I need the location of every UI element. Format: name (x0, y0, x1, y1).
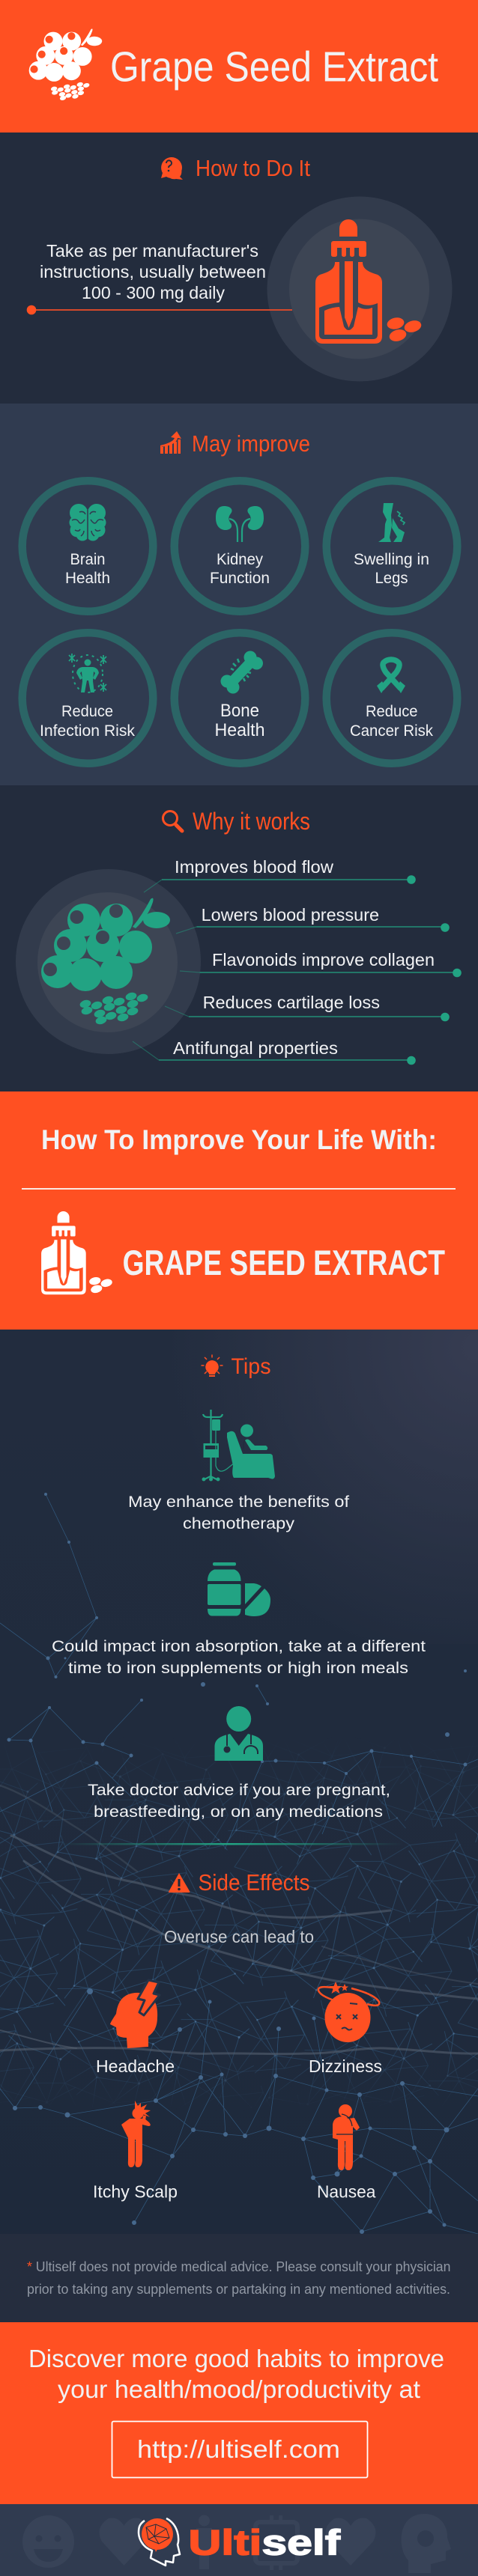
panel: how to improve banner (0, 1091, 478, 1330)
tip text (128, 1493, 349, 1532)
label: Health (214, 720, 265, 740)
tip: iron absorption (52, 1562, 426, 1677)
icon: dizzy face (318, 1982, 379, 2042)
label (40, 702, 135, 740)
heading: may improve: May improve (192, 430, 310, 457)
url box (112, 2421, 367, 2478)
illustration circles (16, 869, 201, 1054)
heading: side effects: Side Effects (198, 1869, 310, 1896)
benefit: cartilage: Reduces cartilage loss (203, 993, 380, 1012)
icon: kidneys (216, 506, 264, 542)
call to action text (28, 2345, 444, 2403)
benefit list (133, 857, 462, 1065)
panel: footer (0, 2504, 478, 2576)
benefit: collagen (180, 950, 462, 977)
title: Grape Seed Extract (110, 43, 438, 91)
ring: kidney function (175, 481, 305, 612)
call to action text: Discover more good habits to improve (28, 2345, 444, 2372)
tip text (88, 1782, 390, 1821)
heading: why it works: Why it works (193, 808, 310, 835)
benefit: collagen: Flavonoids improve collagen (212, 950, 435, 969)
panel: may improve (0, 404, 478, 785)
icon: iv stand and chair (202, 1410, 275, 1481)
benefit: antifungal (133, 1038, 416, 1065)
dosage text: 100 - 300 mg daily (82, 283, 225, 302)
logo: ultiself: Ulti self (189, 2523, 340, 2563)
panel: tips and side effects background (0, 1330, 478, 2234)
label (214, 701, 265, 740)
call to action text: your health/mood/productivity at (58, 2375, 420, 2403)
label (210, 550, 270, 587)
label (354, 550, 429, 587)
tip text: breastfeeding, or on any medications (94, 1803, 383, 1821)
benefit: cartilage (165, 993, 450, 1021)
label: Swelling in (354, 550, 429, 568)
icon: supplement jar and tablet (208, 1562, 270, 1616)
benefit: blood pressure: Lowers blood pressure (202, 905, 379, 925)
ring: swelling in legs (327, 481, 457, 612)
icon: white grape bunch (29, 28, 102, 101)
dosage text: Take as per manufacturer's (46, 241, 258, 261)
icon: protected person (69, 654, 106, 692)
label: Bone (220, 701, 259, 721)
icon: brain head logo (139, 2518, 180, 2566)
icon: white dropper bottle (41, 1211, 113, 1294)
icon: nauseous figure (333, 2104, 360, 2170)
logo: ultiself (139, 2518, 340, 2566)
panel: call to action (0, 2322, 478, 2504)
icon: bone (220, 651, 263, 693)
benefit: antifungal: Antifungal properties (173, 1038, 338, 1058)
intro text: overuse: Overuse can lead to (164, 1927, 314, 1946)
dosage text (40, 241, 266, 302)
illustration circles (267, 196, 453, 382)
disclaimer text (27, 2259, 451, 2297)
faint background icons (22, 2514, 451, 2573)
side effect: dizziness: Dizziness (309, 2056, 382, 2076)
benefit: blood flow: Improves blood flow (175, 857, 333, 877)
label: Reduce (366, 702, 418, 720)
tip text: Could impact iron absorption, take at a different (52, 1638, 426, 1655)
tip text: chemotherapy (183, 1515, 295, 1532)
label: Function (210, 569, 270, 587)
banner heading: How To Improve Your Life With: (41, 1124, 437, 1155)
ring: reduce infection risk (22, 633, 153, 764)
label: Legs (375, 569, 408, 587)
side effect: nausea (317, 2104, 376, 2201)
icon: scratching figure (121, 2101, 151, 2167)
tip: chemotherapy (128, 1410, 349, 1532)
connector line with dot (27, 305, 292, 314)
label: Brain (70, 550, 105, 568)
side effect: itchy scalp (93, 2101, 178, 2201)
ring: reduce cancer risk (327, 633, 457, 764)
icon: brain (69, 504, 106, 541)
label: Kidney (217, 550, 263, 568)
side effect: itchy scalp: Itchy Scalp (93, 2181, 178, 2201)
benefit: blood flow (144, 857, 416, 892)
side effect: headache (96, 1980, 175, 2076)
tip text: Take doctor advice if you are pregnant, (88, 1782, 390, 1799)
url box: http://ultiself.com (137, 2435, 340, 2463)
heading: tips (201, 1354, 271, 1379)
panel: how to do it (0, 133, 478, 404)
tip text: May enhance the benefits of (128, 1493, 349, 1511)
panel: disclaimer (0, 2234, 478, 2322)
icon: head with lightning (110, 1980, 160, 2048)
disclaimer text: prior to taking any supplements or partaking in any mentioned activities. (27, 2282, 450, 2297)
network texture (0, 1493, 478, 2234)
icon: dropper bottle (315, 219, 423, 344)
dosage text: instructions, usually between (40, 262, 266, 281)
tip text (52, 1638, 426, 1677)
benefit: blood pressure (176, 905, 450, 934)
tip text: time to iron supplements or high iron meals (68, 1660, 408, 1677)
side effect: dizziness (309, 1982, 382, 2076)
icon: teal grape bunch (41, 898, 170, 1026)
icon: doctor (214, 1706, 263, 1761)
icon: legs (378, 503, 405, 542)
label: Infection Risk (40, 722, 135, 740)
heading: how to do it: How to Do It (196, 155, 310, 181)
tip: doctor advice (88, 1706, 390, 1821)
header banner (0, 0, 478, 133)
label (65, 550, 110, 587)
disclaimer text: * Ultiself does not provide medical advice. Please consult your physician (27, 2259, 451, 2274)
label (350, 702, 433, 740)
panel: why it works (0, 785, 478, 1091)
label: Cancer Risk (350, 722, 433, 740)
side effect: nausea: Nausea (317, 2181, 376, 2201)
ring: brain health (22, 481, 153, 612)
side effect: headache: Headache (96, 2056, 175, 2076)
heading: tips: Tips (231, 1354, 271, 1379)
icon: ribbon (377, 660, 405, 693)
label: Reduce (61, 702, 113, 720)
label: Health (65, 569, 110, 587)
ring: bone health (175, 633, 305, 764)
